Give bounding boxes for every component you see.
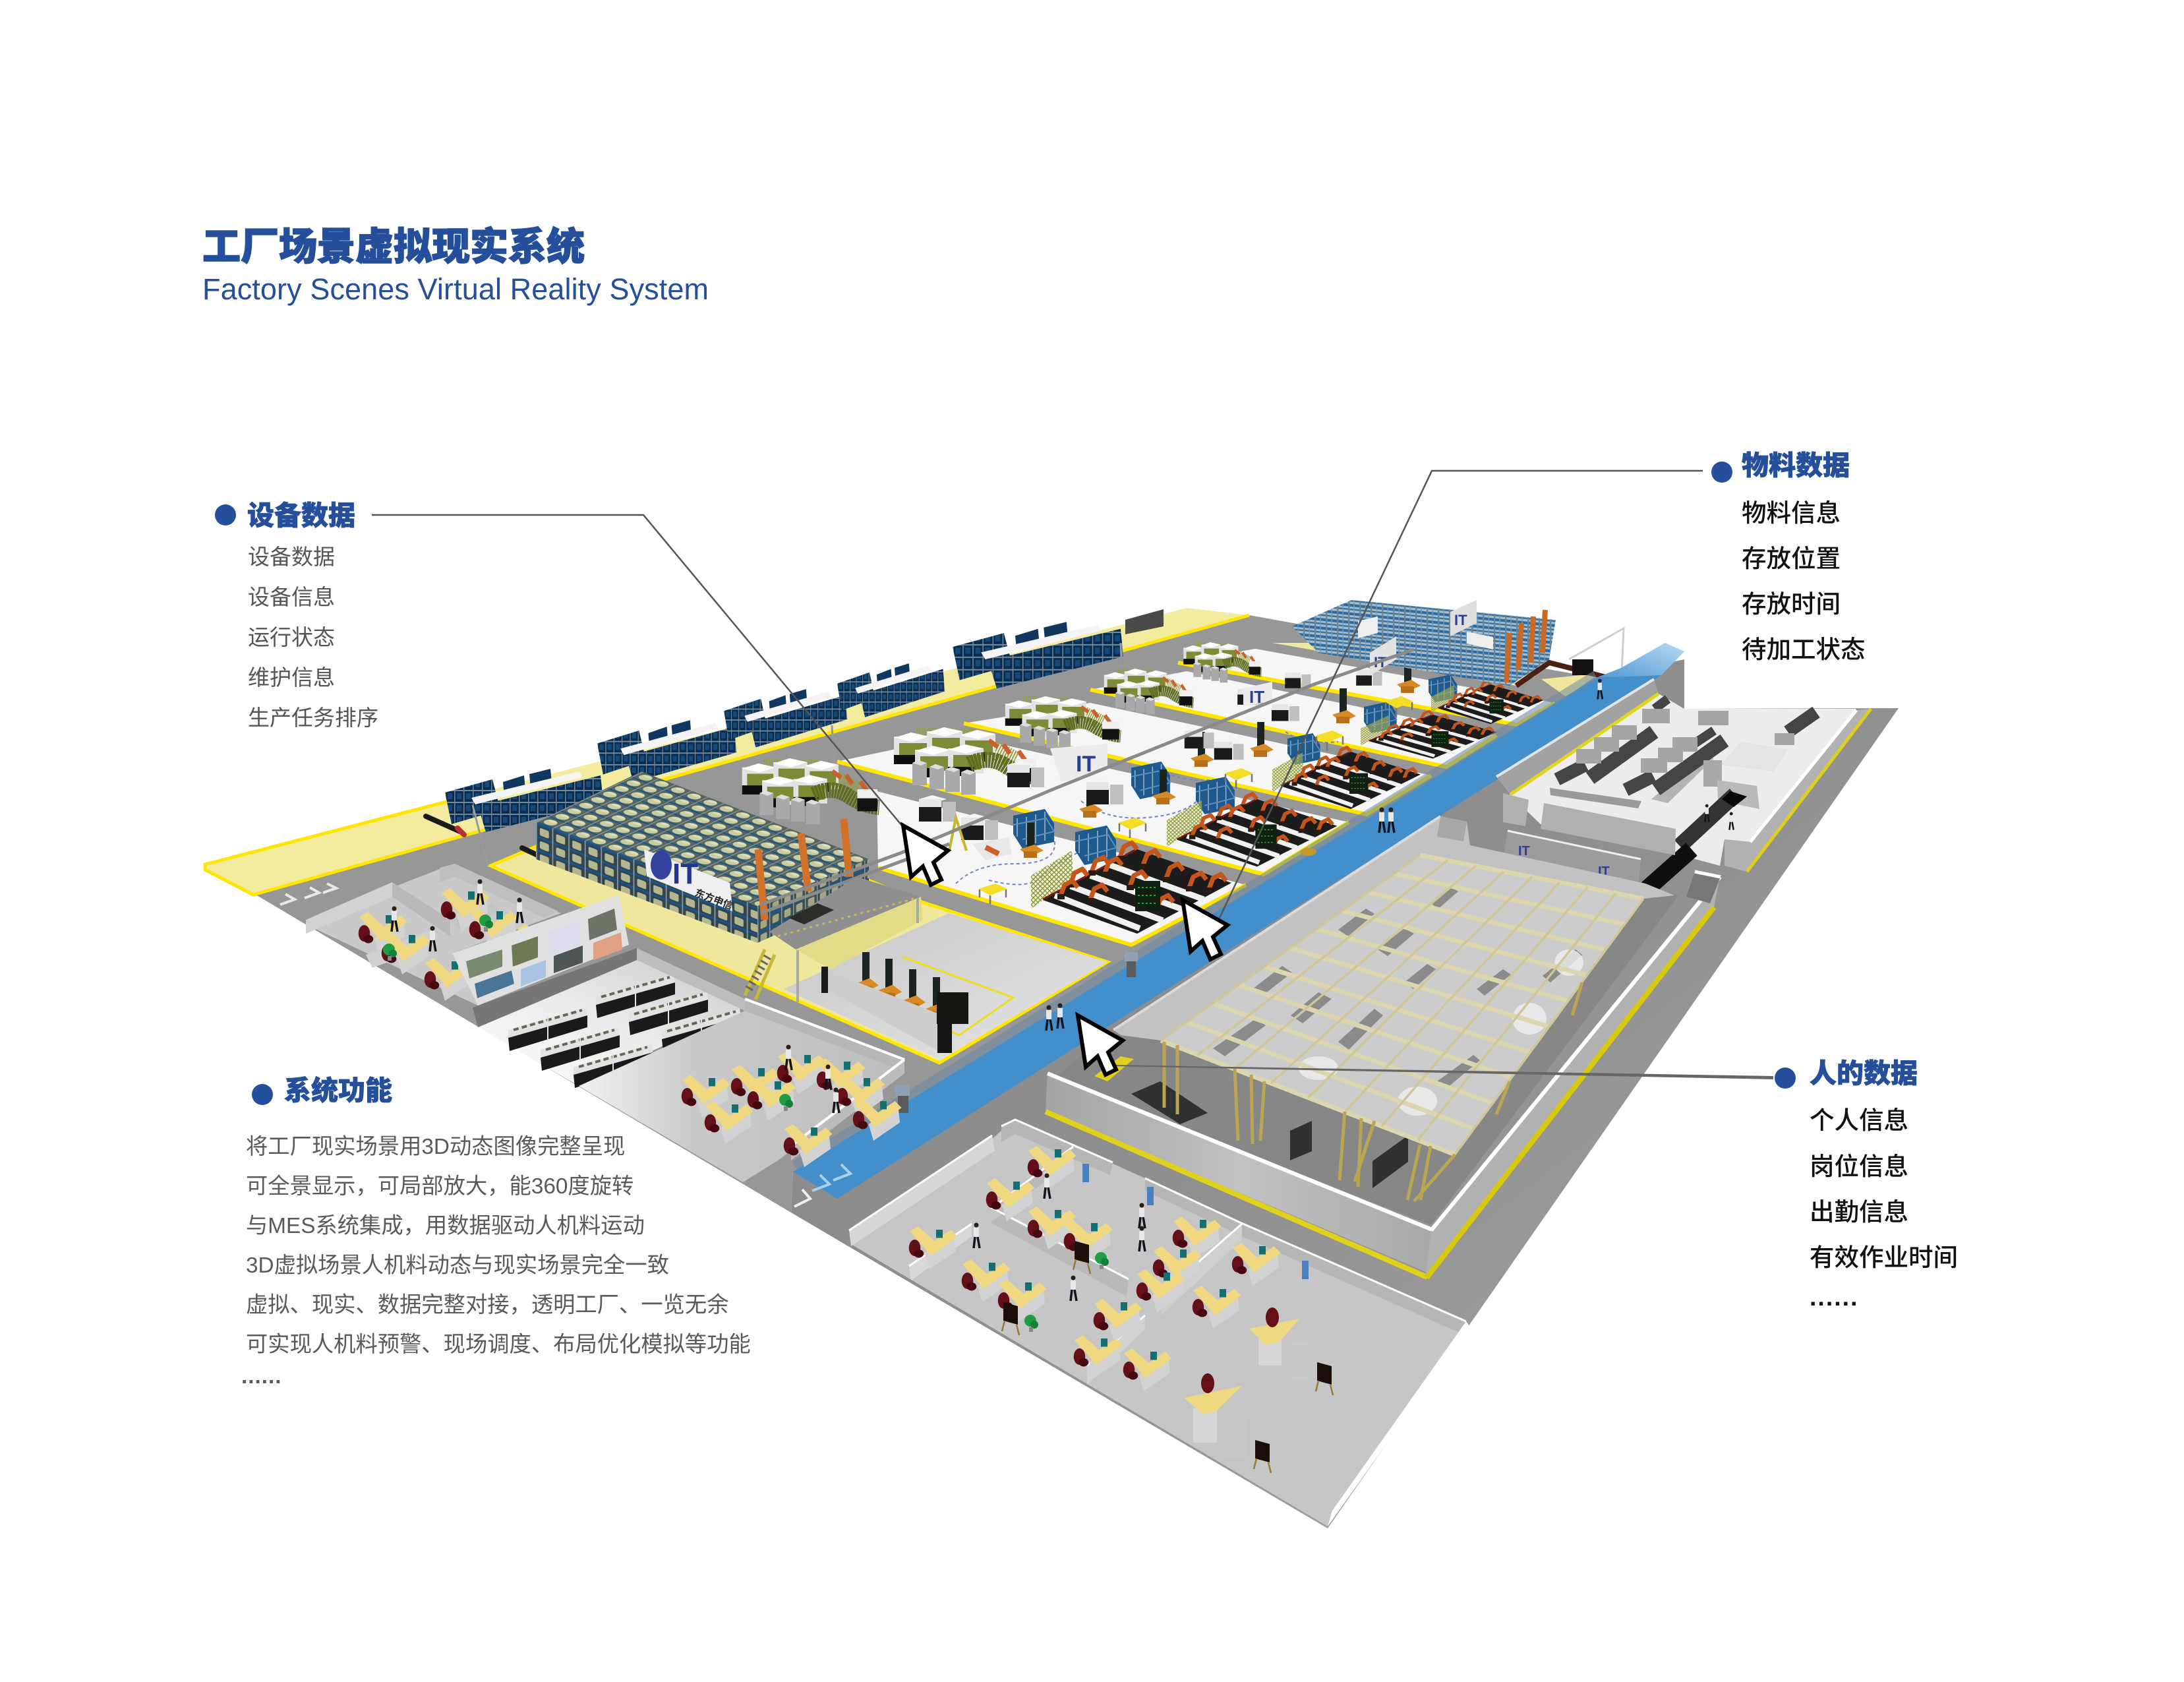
list: 有效作业时间 <box>1810 1244 1958 1271</box>
conveyor stations <box>1576 709 1794 773</box>
list: 存放时间 <box>1742 590 1841 618</box>
list <box>1810 1106 1958 1311</box>
subtitle: Factory Scenes Virtual Reality System <box>202 272 709 306</box>
list: 物料信息 <box>1742 499 1841 527</box>
list <box>1742 499 1866 663</box>
heading: 物料数据 <box>1742 450 1850 481</box>
dock zone <box>821 952 1013 1053</box>
upper right hall: IT <box>1518 844 1530 858</box>
robot cells <box>1031 681 1543 934</box>
cursor icon 2 <box>1183 900 1227 959</box>
cursor icon 3 <box>1078 1015 1123 1075</box>
leader line: material data <box>1220 471 1703 918</box>
rack sign: 东方申信 <box>694 887 734 912</box>
bullet <box>1711 462 1732 483</box>
near wall <box>1046 1073 1434 1273</box>
kiosks <box>895 848 1316 1113</box>
body text: 可全景显示，可局部放大，能360度旋转 <box>246 1174 634 1199</box>
list: 待加工状态 <box>1742 636 1866 663</box>
bullet <box>215 504 236 526</box>
conveyor frames <box>1550 788 1641 808</box>
big transparent hall <box>1046 816 1721 1278</box>
leader line: personnel data <box>1113 1065 1773 1079</box>
leader line: equipment data <box>372 515 902 826</box>
middle work cells <box>919 658 1457 904</box>
plate machine shadows <box>1213 887 1582 1088</box>
partition walls <box>1541 803 1676 855</box>
list: 出勤信息 <box>1810 1198 1908 1226</box>
mezzanine platform <box>745 877 921 1002</box>
sign boards in production area: IT <box>1249 687 1264 707</box>
heading: 系统功能 <box>284 1075 392 1106</box>
upper right hall: IT <box>1598 864 1610 879</box>
list <box>248 545 378 730</box>
panel: system functions <box>241 1075 751 1389</box>
overhead conveyor tube <box>761 649 1414 913</box>
hall right wall <box>1725 709 1871 872</box>
list: 运行状态 <box>248 625 335 649</box>
left and back interior walls <box>1113 816 1674 1040</box>
rack sign: IT <box>672 858 698 890</box>
list: 设备信息 <box>248 585 335 609</box>
factory scene <box>205 600 1899 1528</box>
list: 存放位置 <box>1742 545 1841 572</box>
body text: 3D虚拟场景人机料动态与现实场景完全一致 <box>246 1253 669 1278</box>
list: 维护信息 <box>248 665 335 690</box>
steel beam lattice <box>1161 855 1643 1155</box>
small conveyors <box>426 816 545 858</box>
far blue warehouse rack: IT <box>1454 612 1467 628</box>
ground: right part <box>791 659 1899 1528</box>
bullet <box>1775 1067 1796 1089</box>
body text: 虚拟、现实、数据完整对接，透明工厂、一览无余 <box>246 1293 729 1317</box>
belt line <box>1680 795 1735 846</box>
list: 个人信息 <box>1810 1106 1908 1134</box>
cursor icon 1 <box>903 826 948 885</box>
conveyors <box>1557 699 1816 790</box>
silo clusters <box>742 642 1262 824</box>
panel: personnel data <box>1775 1058 1958 1311</box>
list: 生产任务排序 <box>248 706 378 730</box>
translucent plate <box>1161 855 1643 1155</box>
heading: 设备数据 <box>247 500 355 531</box>
rack zone floor <box>490 795 1107 1063</box>
title <box>202 225 709 306</box>
sign boards in production area <box>1050 682 1272 782</box>
body text <box>241 1135 751 1389</box>
upper right hall <box>1496 679 1871 891</box>
list: 岗位信息 <box>1810 1153 1908 1180</box>
body text: ...... <box>241 1364 282 1389</box>
hall floor <box>1055 838 1678 1225</box>
body text: 与MES系统集成，用数据驱动人机料运动 <box>246 1214 645 1238</box>
white machine <box>1721 742 1788 771</box>
blue corridor <box>793 643 1684 1207</box>
people on corridor <box>1046 679 1603 1031</box>
yellow band <box>205 608 1249 895</box>
production floors <box>837 643 1600 945</box>
title: 工厂场景虚拟现实系统 <box>202 225 585 268</box>
ground: factory floor <box>256 615 1596 1213</box>
office walls <box>849 1120 1470 1526</box>
far shelves row <box>445 609 1164 866</box>
bottom office <box>849 1120 1470 1526</box>
panel: equipment data <box>215 500 378 730</box>
lattice legs <box>1164 982 1582 1201</box>
office desks <box>909 1146 1333 1473</box>
main rack with barrels <box>536 771 869 943</box>
panel: material data <box>1711 450 1866 663</box>
far blue warehouse rack <box>1292 600 1624 686</box>
bullet <box>252 1084 273 1105</box>
chevrons on road <box>280 884 336 905</box>
right wall <box>1425 877 1720 1276</box>
far blue warehouse rack: IT <box>1374 654 1387 671</box>
body text: 将工厂现实场景用3D动态图像完整呈现 <box>246 1135 625 1159</box>
office C <box>579 999 904 1182</box>
body text: 可实现人机料预警、现场调度、布局优化模拟等功能 <box>246 1333 751 1357</box>
platform shadow <box>796 897 923 969</box>
control room <box>452 895 745 1088</box>
sign boards in production area: IT <box>1076 752 1096 777</box>
wall between control room and road <box>637 948 745 1011</box>
office A <box>306 864 566 1006</box>
AGV dashed paths <box>956 732 1338 884</box>
display wall <box>452 895 637 1027</box>
dock floor <box>784 913 1107 1060</box>
rack sign <box>644 849 734 912</box>
heading: 人的数据 <box>1810 1058 1918 1089</box>
list: ...... <box>1810 1283 1859 1311</box>
interior machines <box>1131 1081 1408 1188</box>
list: 设备数据 <box>248 545 335 569</box>
